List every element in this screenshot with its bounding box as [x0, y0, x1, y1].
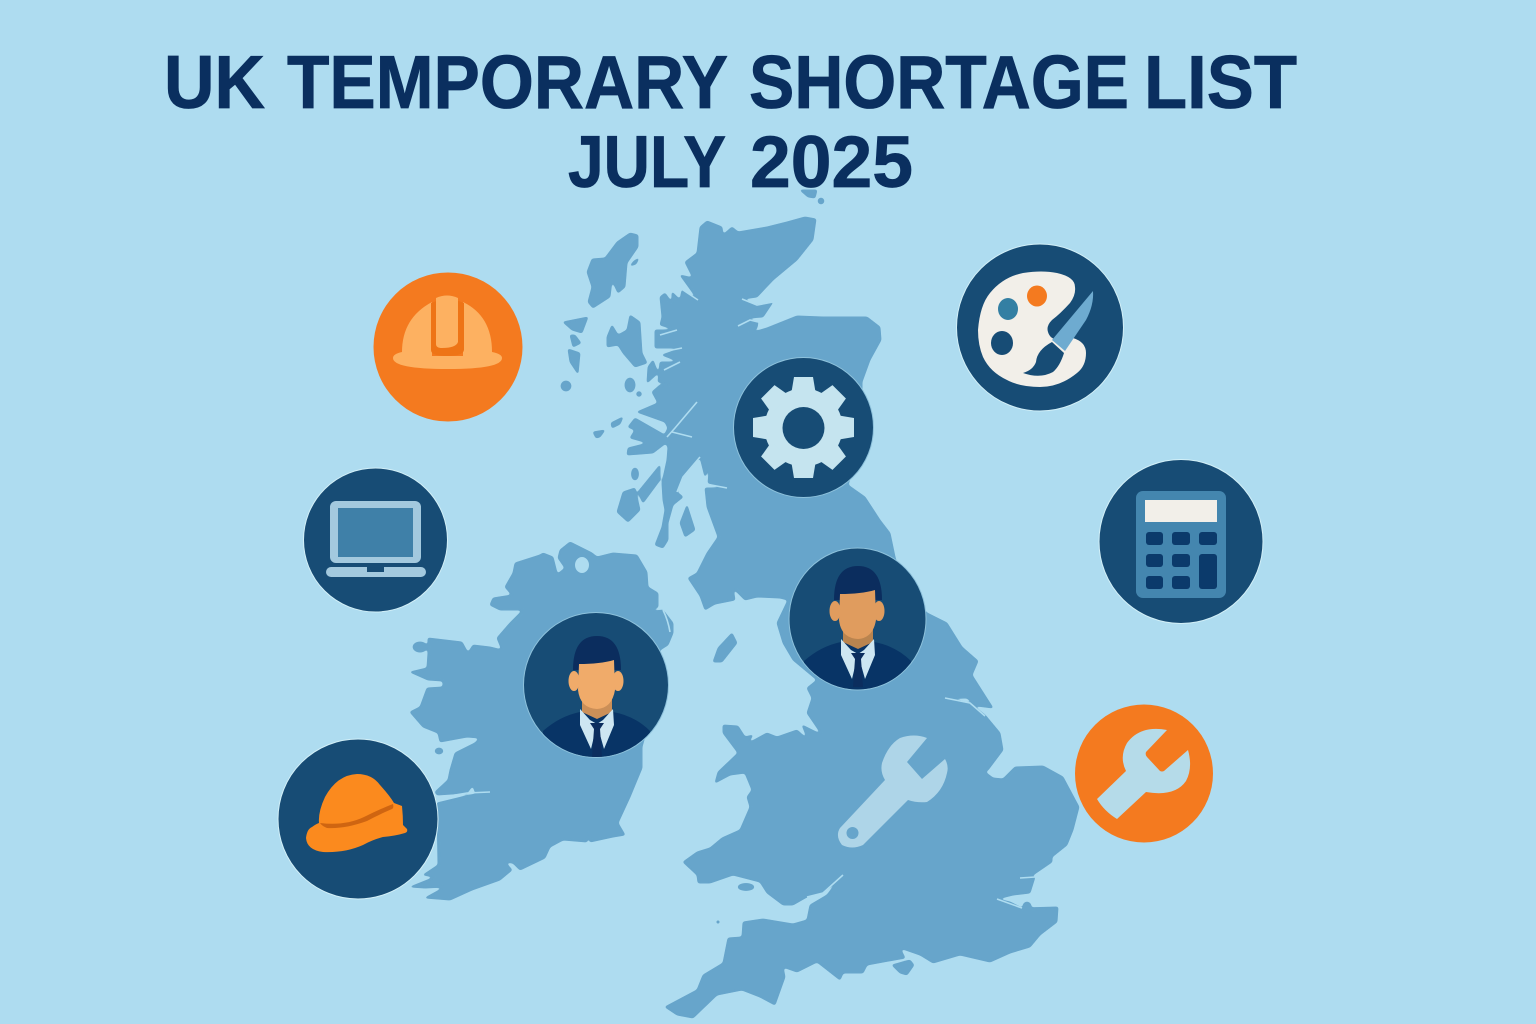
- landmasses: [410, 190, 1079, 1018]
- loughs and inlets: [437, 288, 1035, 908]
- title: LIST: [1144, 40, 1297, 124]
- title: SHORTAGE: [749, 40, 1129, 124]
- icon: person, right: [789, 548, 926, 695]
- icon: orange hard hat: [374, 272, 522, 422]
- icon: paint palette: [956, 244, 1124, 411]
- infographic canvas: [168, 54, 1297, 1018]
- map of UK and Ireland: [410, 190, 1079, 1018]
- icon: orange wrench: [1075, 704, 1213, 842]
- title: [164, 40, 1297, 203]
- icon: person, left: [524, 612, 668, 760]
- icon: laptop: [304, 468, 448, 612]
- icon: calculator: [1099, 460, 1263, 624]
- title: JULY: [568, 122, 726, 203]
- title: 2025: [750, 122, 913, 203]
- title: TEMPORARY: [287, 40, 728, 124]
- icon: wrench on map: [838, 736, 948, 848]
- icon: orange hat: [278, 739, 438, 899]
- icon: gear: [734, 358, 874, 498]
- title: UK: [164, 40, 265, 124]
